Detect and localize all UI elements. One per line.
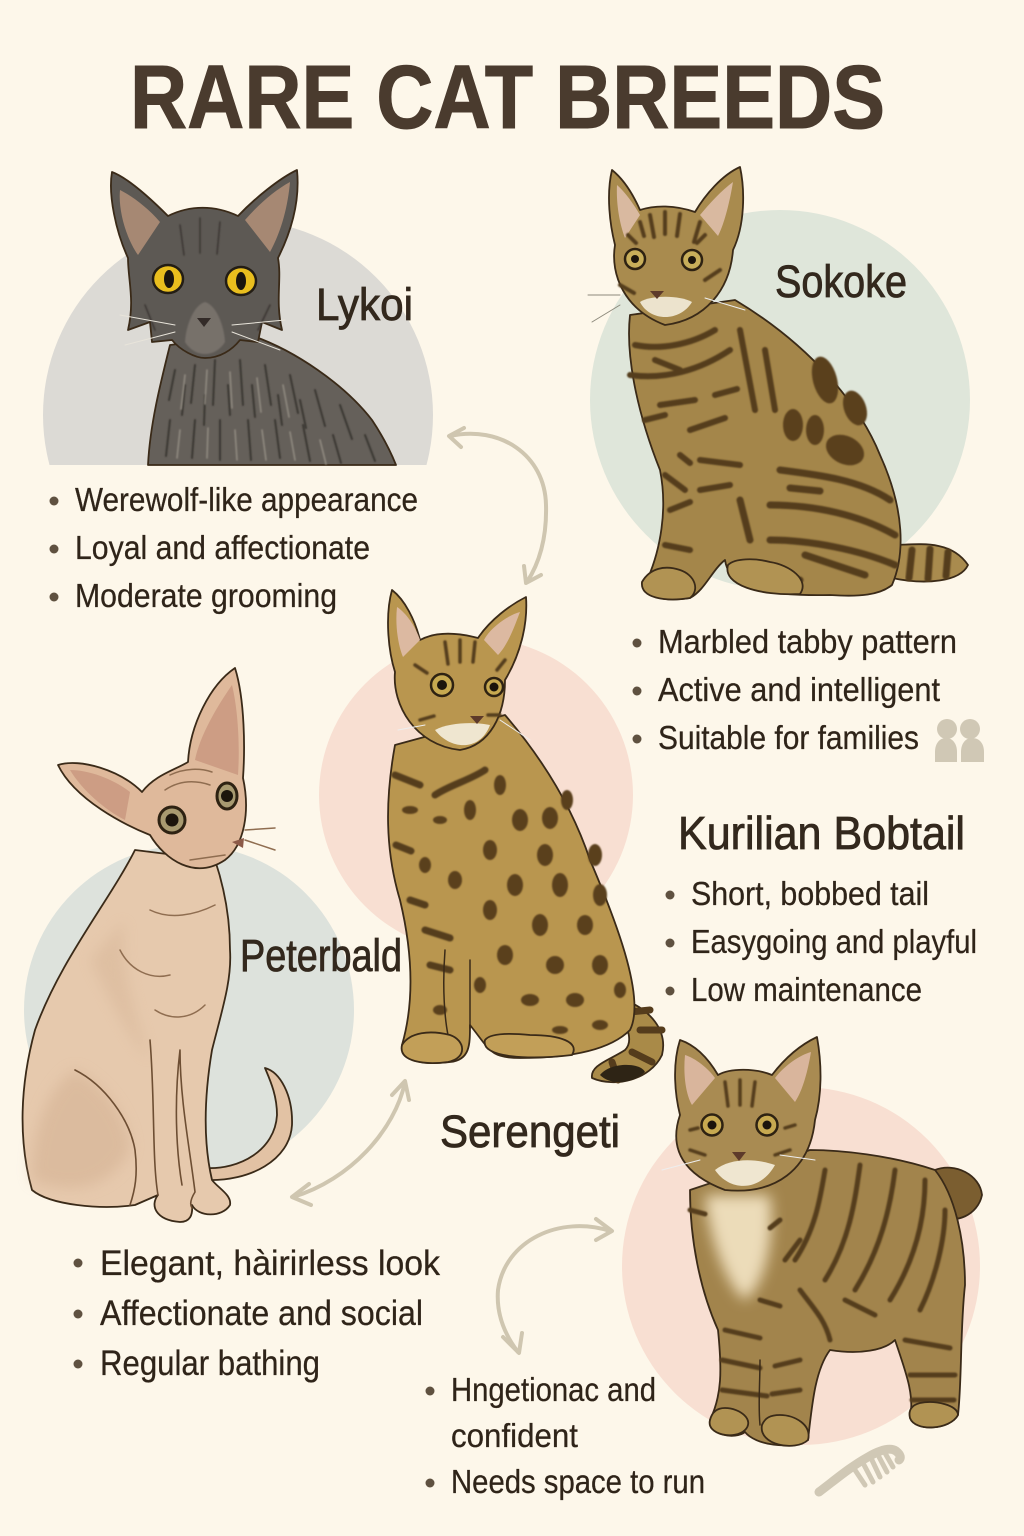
Peterbald name: Peterbald — [240, 930, 402, 981]
Serengeti traits: Needs space to run — [451, 1463, 705, 1500]
illustration: Serengeti cat — [388, 590, 663, 1082]
Serengeti background circle — [319, 638, 633, 952]
arrow: Peterbald to Serengeti — [292, 1081, 409, 1205]
title: RARE CAT BREEDS — [130, 48, 885, 148]
Sokoke traits — [632, 623, 957, 756]
Kurilian Bobtail traits — [666, 875, 977, 1008]
Sokoke traits: Marbled tabby pattern — [658, 623, 957, 660]
Kurilian background circle — [622, 1087, 980, 1445]
illustration: Peterbald cat — [23, 668, 292, 1222]
Sokoke name: Sokoke — [775, 256, 907, 307]
illustration: Kurilian Bobtail cat — [662, 1037, 982, 1446]
Peterbald traits: Regular bathing — [100, 1344, 320, 1383]
Kurilian Bobtail traits: Easygoing and playful — [691, 923, 977, 960]
Serengeti traits — [426, 1371, 705, 1500]
Lykoi traits: Werewolf-like appearance — [75, 481, 418, 518]
Lykoi traits: Moderate grooming — [75, 577, 337, 614]
Lykoi background circle — [43, 228, 433, 465]
Kurilian Bobtail traits: Low maintenance — [691, 971, 922, 1008]
Sokoke traits: Active and intelligent — [658, 671, 940, 708]
illustration: Lykoi cat — [111, 170, 396, 465]
arrow: Serengeti to Kurilian Bobtail — [498, 1219, 612, 1353]
panel: Kurilian Bobtail — [622, 807, 982, 1492]
icon: comb — [819, 1449, 900, 1492]
Lykoi traits: Loyal and affectionate — [75, 529, 370, 566]
panel: Peterbald — [23, 668, 440, 1383]
Peterbald traits: Elegant, hàirirless look — [100, 1244, 440, 1283]
panel: Lykoi — [43, 170, 433, 614]
Peterbald background circle — [24, 845, 354, 1175]
illustration: Sokoke cat — [588, 167, 968, 599]
Peterbald traits: Affectionate and social — [100, 1294, 423, 1333]
panel: Sokoke — [588, 167, 984, 762]
Sokoke traits: Suitable for families — [658, 719, 919, 756]
Peterbald traits — [74, 1244, 440, 1383]
panel: Serengeti — [319, 590, 705, 1500]
Lykoi traits — [50, 481, 418, 614]
icon: family — [935, 719, 984, 762]
Serengeti name: Serengeti — [440, 1106, 620, 1157]
Kurilian Bobtail traits: Short, bobbed tail — [691, 875, 929, 912]
Serengeti traits: Hngetionac and — [451, 1371, 656, 1408]
Kurilian Bobtail name: Kurilian Bobtail — [678, 807, 965, 859]
Serengeti traits: confident — [451, 1417, 578, 1454]
Lykoi name: Lykoi — [316, 279, 413, 330]
arrow: Lykoi to Serengeti — [449, 428, 546, 583]
Sokoke background circle — [590, 210, 970, 590]
